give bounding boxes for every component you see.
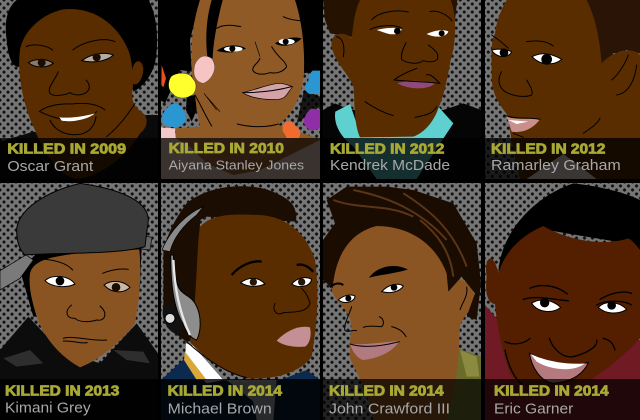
name: Kimani Grey: Kimani Grey: [5, 401, 92, 417]
panel: Kimani Grey: [0, 183, 158, 417]
panel: John Crawford III: [323, 183, 481, 420]
portrait: Aiyana Stanley Jones: [161, 0, 320, 179]
icon: purple flower: [304, 108, 320, 131]
heading: Killed in 2009: KILLED IN 2009: [7, 141, 126, 157]
heading: Killed in 2013: KILLED IN 2013: [5, 383, 119, 399]
name: Michael Brown: Michael Brown: [168, 401, 272, 417]
portrait: Michael Brown: [161, 186, 320, 420]
name: Oscar Grant: Oscar Grant: [7, 159, 93, 175]
icon: blue flower right: [305, 71, 320, 94]
icon: yellow flower: [169, 73, 196, 98]
panel: Ramarley Graham: [485, 0, 640, 179]
panel: Oscar Grant: [0, 0, 158, 179]
panel: Aiyana Stanley Jones: [161, 0, 320, 179]
name: Ramarley Graham: Ramarley Graham: [491, 158, 621, 174]
name: Aiyana Stanley Jones: Aiyana Stanley Jones: [169, 157, 304, 172]
icon: orange flower: [282, 121, 300, 138]
portrait: Kendrek McDade: [323, 0, 481, 179]
heading: Killed in 2014: KILLED IN 2014: [168, 383, 283, 399]
heading: Killed in 2012: KILLED IN 2012: [330, 141, 444, 157]
heading: Killed in 2014: KILLED IN 2014: [329, 383, 445, 399]
icon: blue flower: [162, 104, 186, 127]
heading: Killed in 2012: KILLED IN 2012: [491, 141, 605, 157]
name: Eric Garner: Eric Garner: [494, 401, 574, 417]
icon: headphones: [162, 207, 203, 340]
panel: Eric Garner: [485, 183, 640, 420]
portrait: Eric Garner: [485, 183, 640, 420]
hair: dreadlocks: [323, 187, 481, 320]
heading: Killed in 2010: KILLED IN 2010: [169, 141, 284, 157]
icon: pink flower: [194, 56, 215, 83]
icon: hat: [17, 183, 148, 255]
portrait: Oscar Grant: [0, 0, 158, 179]
portrait: Ramarley Graham: [491, 0, 640, 179]
heading: Killed in 2014: KILLED IN 2014: [494, 383, 610, 399]
name: Kendrek McDade: Kendrek McDade: [330, 158, 450, 174]
portrait: Kimani Grey: [0, 183, 158, 420]
name: John Crawford III: John Crawford III: [329, 401, 450, 417]
panel: Kendrek McDade: [323, 0, 481, 179]
panel: Michael Brown: [161, 183, 320, 420]
portrait: John Crawford III: [323, 187, 481, 420]
